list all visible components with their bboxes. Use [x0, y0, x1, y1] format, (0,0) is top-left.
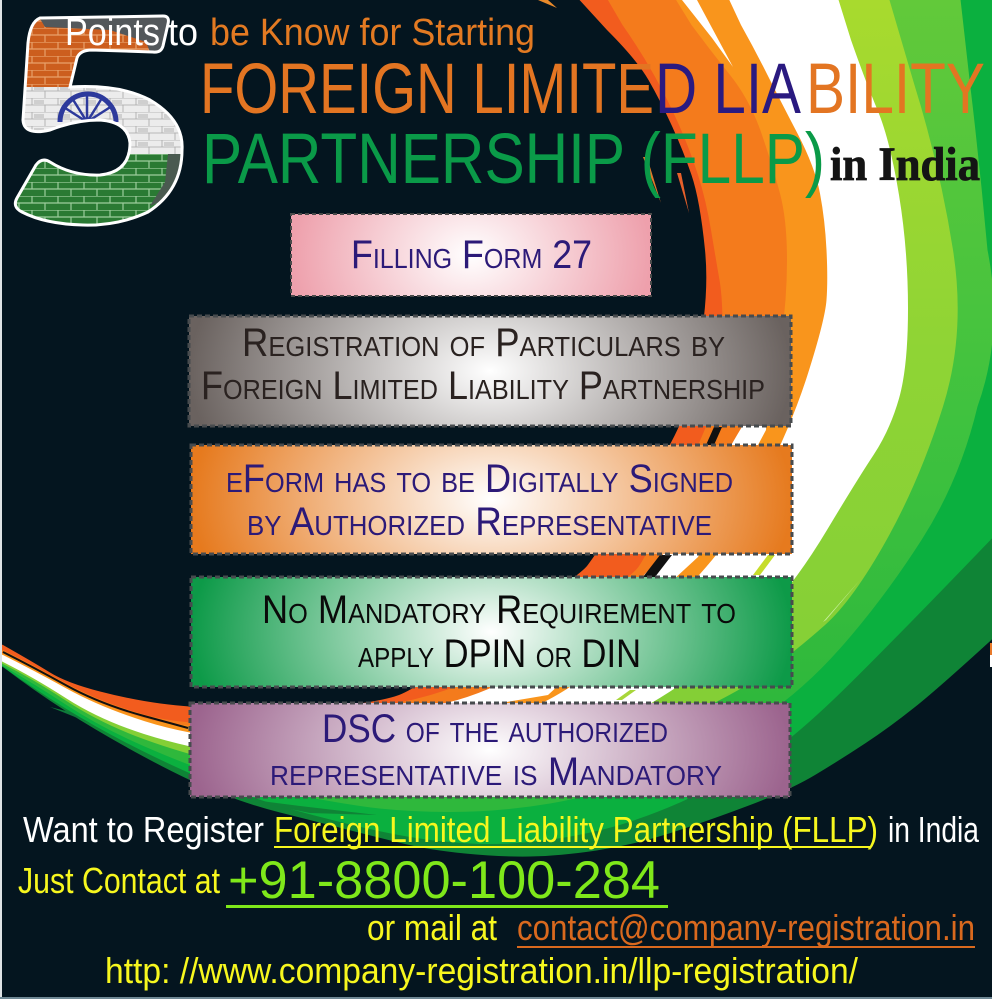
title: FOREIGN LIMITE [200, 50, 654, 129]
contact block: http: //www.company-registration.in/llp-registration/ [105, 950, 858, 991]
panel: eform digitally signed: by Authorized Representative [247, 500, 712, 544]
panel: registration of particulars [189, 316, 791, 426]
panel: no mandatory requirement: No Mandatory Requirement to [262, 588, 736, 632]
icon: ashoka chakra [60, 94, 116, 122]
title: D LIA [655, 50, 802, 129]
panel: filling form 27 [291, 214, 651, 296]
big number 5 with tricolour brick fill [14, 14, 184, 227]
title: in India [830, 138, 980, 191]
panel: registration of particulars: Foreign Limited Liability Partnership [201, 364, 765, 408]
panel: registration of particulars: Registration of Particulars by [242, 321, 725, 365]
title [65, 12, 985, 199]
contact block: Want to Register [23, 809, 264, 850]
panel: no mandatory requirement [191, 577, 792, 687]
contact block: Foreign Limited Liability Partnership (FLLP) [274, 809, 878, 850]
contact block: Just Contact at [18, 860, 220, 901]
contact block [18, 809, 980, 991]
panel: dsc mandatory: DSC of the authorized [322, 707, 668, 751]
title: PARTNERSHIP (FLLP) [202, 120, 825, 199]
panel: filling form 27: Filling Form 27 [351, 233, 592, 277]
contact block: or mail at [367, 907, 497, 948]
panel: eform digitally signed [191, 445, 792, 554]
title: Points [65, 12, 160, 54]
contact block: +91-8800-100-284 [228, 851, 660, 910]
panel: dsc mandatory: representative is Mandatory [270, 750, 722, 794]
title: to [168, 12, 198, 54]
panel: dsc mandatory [190, 703, 790, 797]
panel: no mandatory requirement: apply DPIN or DIN [358, 632, 641, 676]
title: be Know for Starting [210, 12, 535, 54]
panel: eform digitally signed: eForm has to be Digitally Signed [226, 457, 733, 501]
